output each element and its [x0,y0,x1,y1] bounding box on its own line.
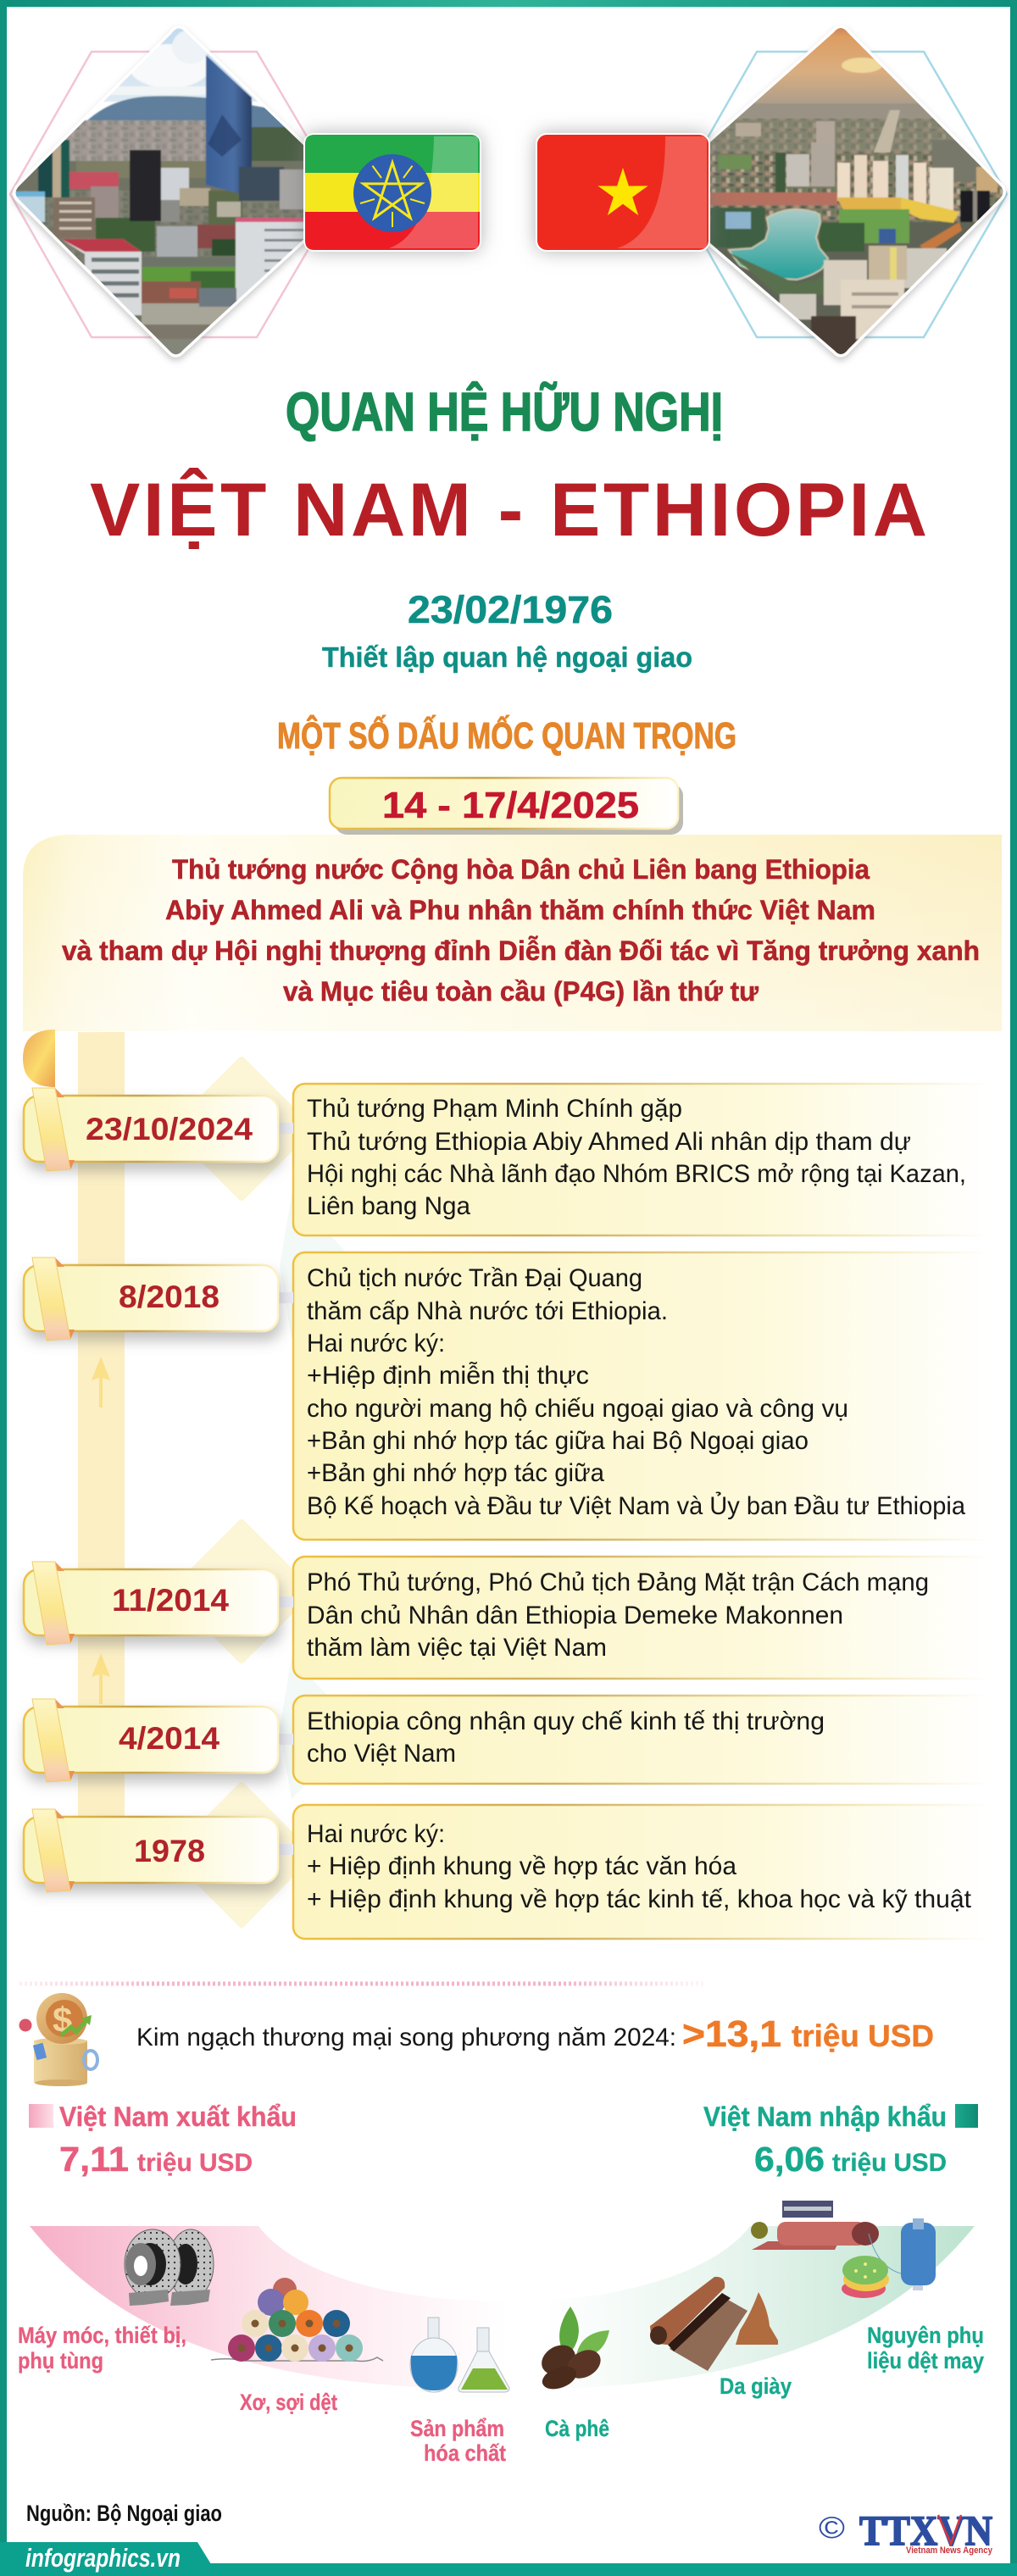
emblem: blue disc and pentagram [353,154,431,232]
date ribbon [24,1257,293,1341]
event box: Dân chủ Nhân dân Ethiopia Demeke Makonnen [307,1602,843,1629]
event box: Hai nước ký: [307,1330,445,1357]
highlight text: và tham dự Hội nghị thượng đỉnh Diễn đàn Đối tác vì Tăng trưởng xanh [62,935,980,966]
event box [293,1084,992,1235]
zipper [782,2201,833,2218]
trade unit: triệu USD [792,2018,934,2053]
timeline item: 1978 [24,1805,992,1939]
import heading: Việt Nam nhập khẩu [703,2101,947,2132]
icon: sewing materials [751,2201,936,2298]
hexagon outline: Ethiopia [10,52,341,337]
labels: export items: Sản phẩm [410,2416,504,2441]
timeline item: 23/10/2024 [24,1084,992,1235]
event box: + Hiệp định khung về hợp tác kinh tế, khoa học và kỹ thuật [307,1885,972,1913]
highlight text: và Mục tiêu toàn cầu (P4G) lần thứ tư [283,976,759,1007]
icon: textile spools [211,2278,383,2362]
event box [293,1696,992,1784]
date ribbon: 1978 [134,1834,205,1868]
photo: Addis Ababa skyline [10,28,307,364]
event box: Bộ Kế hoạch và Đầu tư Việt Nam và Ủy ban Đầu tư Ethiopia [307,1491,965,1520]
date ribbon [24,1699,293,1782]
event box: thăm làm việc tại Việt Nam [307,1634,607,1662]
event box: Hai nước ký: [307,1820,445,1848]
date ribbon: 11/2014 [112,1583,229,1618]
logo: TTXVN: Vietnam News Agency [906,2545,993,2556]
panel: highlight event [23,778,1002,1031]
event box [293,1805,992,1939]
thread spool [901,2218,936,2290]
highlight background [23,835,1002,1031]
export arc [30,2226,508,2390]
trade value: >13,1 [682,2013,781,2055]
labels: export items [18,2323,506,2466]
photo: Hanoi skyline [705,28,1009,364]
highlight text: Abiy Ahmed Ali và Phu nhân thăm chính thức Việt Nam [165,895,875,925]
logo: TTXVN [819,2507,993,2556]
teal marker [955,2104,978,2128]
logo: TTXVN: © [819,2510,845,2545]
import unit: triệu USD [832,2149,947,2177]
title [90,380,927,552]
date ribbon [24,1562,293,1645]
labels: import items: liệu dệt may [867,2348,984,2373]
export summary [29,2101,297,2179]
event box: +Bản ghi nhớ hợp tác giữa [307,1459,604,1487]
icon: coffee [536,2307,609,2393]
icon: brake discs [125,2229,214,2306]
event box: cho người mang hộ chiếu ngoại giao và công vụ [307,1395,848,1423]
event box: Liên bang Nga [307,1192,470,1220]
establishment date [322,588,692,673]
labels: export items: Máy móc, thiết bị, [18,2323,186,2348]
highlight text: Thủ tướng nước Cộng hòa Dân chủ Liên bang Ethiopia [172,854,870,885]
export unit: triệu USD [137,2149,253,2177]
star [598,168,647,215]
event box: Phó Thủ tướng, Phó Chủ tịch Đảng Mặt trận Cách mạng [307,1568,929,1596]
labels: export items: phụ tùng [18,2348,103,2373]
timeline spine [23,1030,360,1924]
trade label: Kim ngạch thương mại song phương năm 2024: [136,2024,676,2051]
buttons [842,2256,889,2298]
icon: leather and shoe [650,2277,778,2371]
highlight date badge: 14 - 17/4/2025 [382,785,639,826]
text: bilateral trade [136,2013,934,2055]
labels: export items: Xơ, sợi dệt [240,2390,337,2415]
pink marker [29,2104,53,2128]
title line 1: QUAN HỆ HỮU NGHỊ [286,380,723,442]
date ribbon [24,1809,293,1892]
icon: chemical flasks [410,2318,509,2392]
arrow: timeline lower [92,1653,110,1704]
footer tab [0,2542,211,2573]
event box: thăm cấp Nhà nước tới Ethiopia. [307,1297,668,1325]
event box [293,1252,992,1540]
source: Nguồn: Bộ Ngoại giao [26,2501,222,2526]
caption: Thiết lập quan hệ ngoại giao [322,641,692,673]
flag: Vietnam [537,135,709,250]
fabric roll [751,2222,879,2250]
icon: money cup: $ [53,2000,72,2040]
event box: Ethiopia công nhận quy chế kinh tế thị trường [307,1707,825,1735]
date ribbon: 23/10/2024 [86,1112,253,1146]
event box: Chủ tịch nước Trần Đại Quang [307,1264,642,1292]
date ribbon: 4/2014 [119,1721,220,1756]
date ribbon [24,1088,293,1171]
event box: Thủ tướng Ethiopia Abiy Ahmed Ali nhân dịp tham dự [307,1128,911,1156]
flag: Ethiopia [305,135,480,250]
import summary [703,2101,978,2179]
event box [293,1557,992,1679]
thread line [869,2234,901,2273]
event box: cho Việt Nam [307,1740,456,1768]
event box: Hội nghị các Nhà lãnh đạo Nhóm BRICS mở rộng tại Kazan, [307,1160,966,1188]
event box: +Hiệp định miễn thị thực [307,1362,589,1390]
arrow: timeline upper [92,1357,110,1407]
title line 2: VIỆT NAM - ETHIOPIA [90,467,927,552]
labels: import items: Da giày [720,2373,792,2399]
event box: Thủ tướng Phạm Minh Chính gặp [307,1095,682,1123]
export value: 7,11 [59,2140,129,2179]
timeline item: 4/2014 [24,1696,992,1784]
logo: TTXVN: TTXVN [859,2507,992,2554]
hexagon outline: Vietnam [675,52,1007,337]
heading: milestones: MỘT SỐ DẤU MỐC QUAN TRỌNG [277,713,736,757]
timeline item: 8/2018 [24,1252,992,1540]
icon: money cup [19,1993,97,2086]
labels: import items [545,2323,984,2441]
footer site name: infographics.vn [25,2543,181,2573]
event box: + Hiệp định khung về hợp tác văn hóa [307,1852,736,1880]
import arc [508,2226,975,2390]
labels: export items: hóa chất [424,2440,506,2466]
event box: +Bản ghi nhớ hợp tác giữa hai Bộ Ngoại giao [307,1427,809,1455]
import value: 6,06 [754,2140,825,2179]
labels: import items: Cà phê [545,2416,609,2441]
highlight date badge [330,778,683,835]
date: 23/02/1976 [408,588,613,631]
date ribbon: 8/2018 [119,1280,220,1314]
panel: header images and flags [0,17,1009,363]
labels: import items: Nguyên phụ [867,2323,984,2348]
timeline item: 11/2014 [24,1557,992,1679]
export heading: Việt Nam xuất khẩu [59,2101,297,2132]
highlight text [62,854,980,1007]
